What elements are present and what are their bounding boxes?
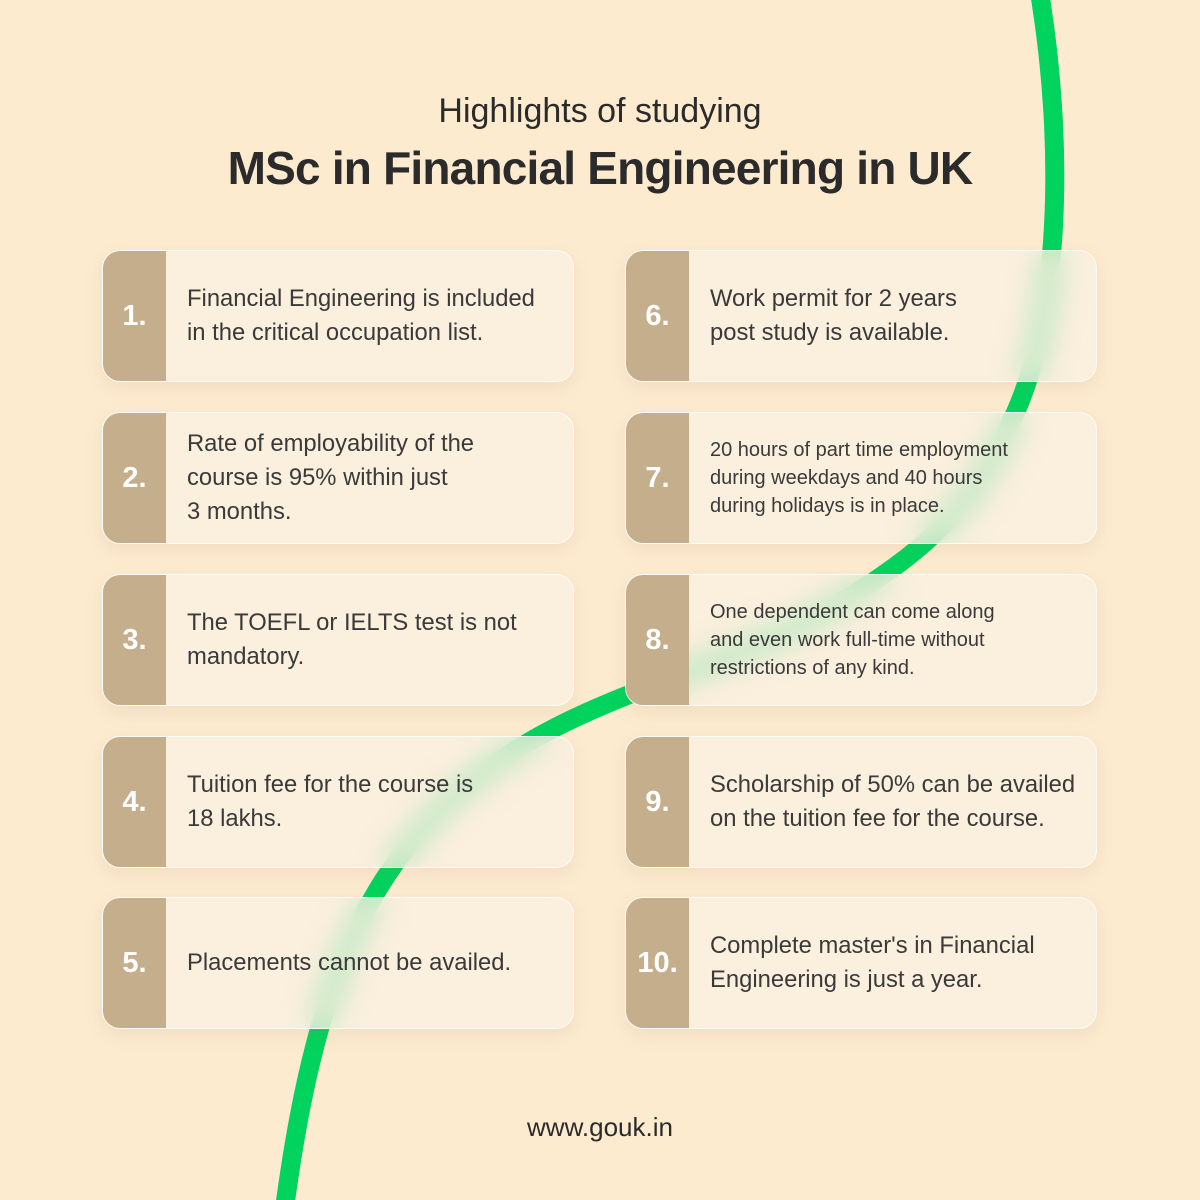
card 7: during holidays is in place. [710,495,945,517]
title [228,92,973,194]
card 1: 1. [122,300,147,332]
card 3: The TOEFL or IELTS test is not [187,609,517,636]
card 2: course is 95% within just [187,464,448,491]
card 8: restrictions of any kind. [710,657,915,679]
card 4: 4. [122,786,147,818]
card 5 [102,897,574,1029]
card 10: Engineering is just a year. [710,966,983,993]
title: Highlights of studying [438,92,762,130]
card 9: 9. [645,786,670,818]
card 1 [102,250,574,382]
card 4 [102,736,574,868]
card 2 [102,412,574,544]
card 5: 5. [122,946,147,978]
card 6 [625,250,1097,382]
card 2: 3 months. [187,498,292,525]
card 5: Placements cannot be availed. [187,949,511,976]
card 6: post study is available. [710,319,949,346]
card 6: 6. [645,300,670,332]
footer url: www.gouk.in [527,1112,673,1142]
card 10 [625,897,1097,1029]
card 4: 18 lakhs. [187,805,282,832]
card 6: Work permit for 2 years [710,285,957,312]
card 7: 7. [645,462,670,494]
card 1: Financial Engineering is included [187,285,535,312]
card 1: in the critical occupation list. [187,319,483,346]
card 10: 10. [637,946,678,978]
card 7: during weekdays and 40 hours [710,467,982,489]
card 3: 3. [122,624,147,656]
card 9: on the tuition fee for the course. [710,805,1045,832]
card 7: 20 hours of part time employment [710,439,1008,461]
card 7 [625,412,1097,544]
card 8: 8. [645,624,670,656]
card 8 [625,574,1097,706]
card 9: Scholarship of 50% can be availed [710,771,1075,798]
card 2: 2. [122,462,147,494]
card 4: Tuition fee for the course is [187,771,473,798]
card 8: One dependent can come along [710,601,995,623]
card 3: mandatory. [187,643,304,670]
card 9 [625,736,1097,868]
card 8: and even work full-time without [710,629,985,651]
title: MSc in Financial Engineering in UK [228,142,972,194]
card 3 [102,574,574,706]
card 10: Complete master's in Financial [710,932,1035,959]
card 2: Rate of employability of the [187,430,474,457]
